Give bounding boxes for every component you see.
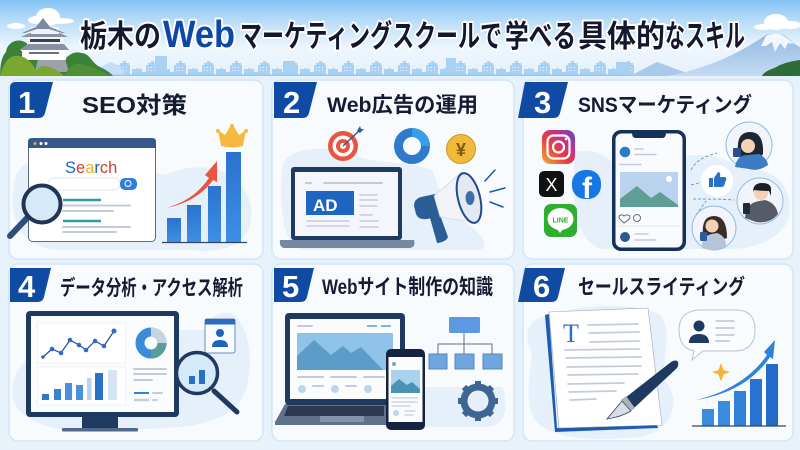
icon: clouds: [7, 8, 800, 30]
laptop: [275, 313, 405, 425]
panel: 2 Web広告の運用: [272, 80, 514, 259]
icon: LINE: LINE: [553, 218, 569, 224]
icon: megaphone: [414, 170, 505, 243]
panel: 5 Webサイト制作の知識: [272, 264, 514, 441]
panel: 3 SNSマーケティング: [518, 80, 793, 259]
icon: crown: [216, 124, 248, 148]
icon: castle and trees: [0, 18, 113, 76]
monitor: [26, 311, 179, 432]
title: 具体的: [578, 19, 665, 54]
title: 栃木の: [80, 19, 161, 54]
badge 1: 1: [18, 85, 35, 120]
bar chart: [42, 370, 117, 400]
title: [80, 14, 745, 56]
speech bubble: [679, 310, 755, 360]
bar chart: [162, 124, 248, 242]
line chart: [41, 328, 117, 359]
mountains: [630, 34, 800, 76]
badge 4: [10, 268, 51, 304]
title: マーケティングスクールで: [240, 19, 502, 54]
person 3: [692, 206, 736, 250]
phone: [386, 349, 425, 430]
heading: データ分析・アクセス解析: [60, 276, 243, 300]
growth arrow: [696, 340, 775, 400]
title: Web: [163, 14, 235, 56]
icon: sparkle: [712, 363, 730, 382]
header banner background: [0, 0, 800, 80]
icon: yen coin: ¥: [456, 140, 466, 160]
badge 1: [10, 82, 53, 120]
icon: X: X: [545, 175, 558, 195]
badge 3: [518, 82, 568, 120]
icon: target: [328, 126, 364, 161]
person 2: [737, 178, 783, 224]
icon: Facebook: [572, 170, 601, 205]
skyline: [90, 50, 690, 76]
badge 6: 6: [533, 269, 550, 304]
badge 5: [274, 268, 314, 304]
search wordmark: Search: [65, 159, 117, 177]
badge 4: 4: [18, 269, 36, 304]
bar chart: [692, 340, 786, 426]
arrow: [166, 161, 217, 208]
title: なスキル: [665, 19, 745, 54]
icon: X: [539, 171, 564, 197]
icon: Instagram: [542, 130, 575, 164]
heading: Web広告の運用: [327, 94, 478, 117]
laptop: [280, 167, 414, 248]
panel: 1 SEO対策: [9, 80, 263, 259]
icon: gear: [458, 381, 498, 421]
badge 2: [274, 82, 317, 120]
browser window: [28, 138, 156, 242]
AD label: AD: [313, 196, 338, 215]
donut chart: [140, 332, 162, 354]
dotted connections: [691, 153, 734, 215]
heading: セールスライティング: [578, 275, 745, 299]
badge 5: 5: [282, 269, 299, 304]
document: [545, 308, 662, 432]
phone: [612, 130, 686, 251]
user window: [205, 319, 235, 353]
badge 3: 3: [534, 85, 551, 120]
icon: donut chart: [398, 128, 430, 160]
heading: SNSマーケティング: [578, 93, 752, 117]
badge 2: 2: [283, 85, 300, 120]
badge 6: [518, 268, 565, 304]
icon: LINE: [544, 204, 577, 237]
icon: fountain pen: [607, 360, 678, 419]
sitemap diagram: [429, 317, 502, 369]
heading: Webサイト制作の知識: [322, 276, 493, 299]
icon: like bubble: [701, 165, 733, 197]
person 1: [726, 122, 772, 170]
heading: SEO対策: [82, 92, 187, 118]
title: 学べる: [505, 19, 576, 54]
icon: yen coin: [446, 134, 476, 164]
icon: magnifier: [176, 352, 237, 412]
icon: magnifier: [10, 186, 60, 236]
icon: Facebook: f: [582, 172, 593, 205]
panel: 6 セールスライティング: [518, 264, 793, 441]
letter T: T: [563, 319, 579, 348]
panel: 4 データ分析・アクセス解析: [9, 264, 263, 441]
